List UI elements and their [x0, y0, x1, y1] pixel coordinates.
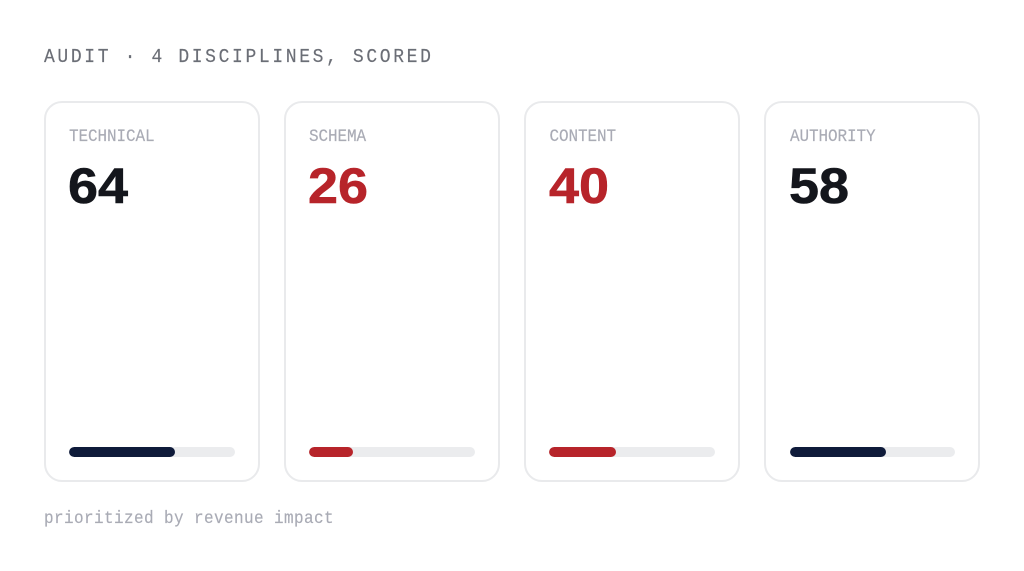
- progress bar: content 40: [549, 447, 714, 457]
- progress bar: schema 26: [309, 447, 474, 457]
- footer note: prioritized by revenue impact: [44, 509, 334, 528]
- progress bar: authority 58: [790, 447, 955, 457]
- panel: technical: [44, 101, 260, 482]
- score: 40: 40: [549, 158, 609, 214]
- label: technical: TECHNICAL: [69, 127, 155, 146]
- score: 64: 64: [68, 158, 128, 214]
- label: authority: AUTHORITY: [790, 127, 876, 146]
- score: 58: 58: [789, 158, 849, 214]
- panel: content: [524, 101, 740, 482]
- progress bar: technical 64: [69, 447, 234, 457]
- panel: schema: [284, 101, 500, 482]
- score: 26: 26: [308, 158, 368, 214]
- panel: authority: [764, 101, 980, 482]
- label: content: CONTENT: [550, 127, 616, 146]
- label: schema: SCHEMA: [309, 127, 366, 146]
- title: AUDIT · 4 DISCIPLINES, SCORED: [44, 47, 434, 68]
